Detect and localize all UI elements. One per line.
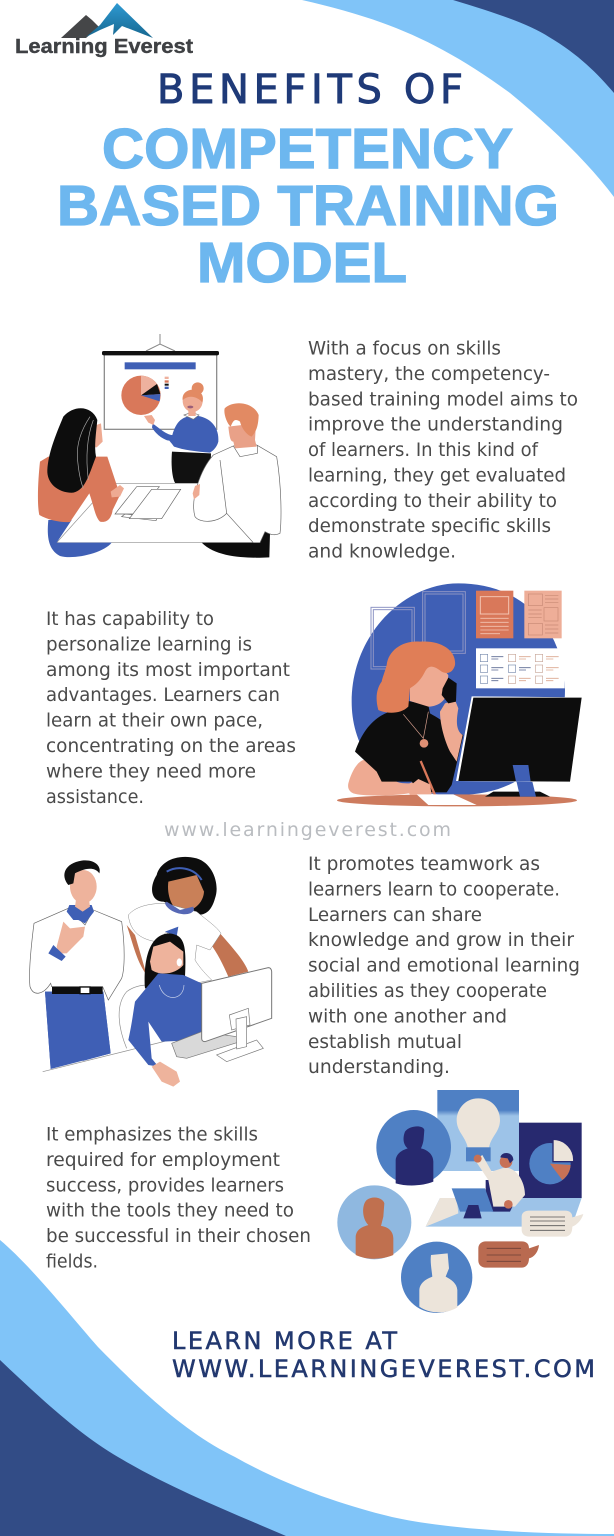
text block 3: establish mutual — [308, 1032, 462, 1053]
bottom left swoosh — [0, 1240, 614, 1536]
text block 4: success, provides learners — [46, 1175, 284, 1196]
text block 3: abilities as they cooperate — [308, 981, 547, 1002]
woman — [348, 641, 463, 795]
avatar circle: terracotta silhouette — [337, 1185, 411, 1259]
speech bubble: cream — [522, 1211, 583, 1237]
papers — [115, 487, 181, 521]
man with orange hair — [193, 403, 281, 558]
projection screen — [102, 334, 219, 429]
text block 1 — [308, 338, 578, 563]
light poster — [524, 591, 562, 638]
standing man — [30, 860, 124, 1069]
heading: competency based training model: MODEL — [197, 231, 407, 295]
desk line — [43, 985, 177, 1072]
top right swoosh — [302, 0, 614, 197]
wall frames — [371, 592, 465, 669]
icon: mountains — [61, 3, 153, 38]
heading: competency based training model: COMPETENCY — [102, 117, 513, 181]
blue backdrop circle — [352, 583, 565, 795]
text block 4: It emphasizes the skills — [46, 1124, 258, 1146]
seated woman — [128, 933, 202, 1087]
text block 2 — [46, 609, 296, 808]
text block 1: based training model aims to — [308, 389, 578, 410]
navy chart panel — [519, 1123, 582, 1198]
text block 1: and knowledge. — [308, 542, 456, 563]
light blue panel with gradient band — [437, 1090, 519, 1171]
text block 4 — [46, 1124, 311, 1272]
avatar circle: dark silhouette — [376, 1110, 451, 1185]
heading: benefits of: BENEFITS OF — [157, 67, 463, 113]
text block 3: with one another and — [308, 1006, 507, 1027]
text block 3: It promotes teamwork as — [308, 854, 540, 875]
desk — [337, 794, 577, 806]
logo: Learning Everest — [15, 3, 193, 58]
illustration: classroom presentation — [38, 334, 281, 558]
woman with dark hair — [38, 408, 124, 557]
text block 4: be successful in their chosen — [46, 1226, 311, 1247]
text block 1: of learners. In this kind of — [308, 440, 538, 461]
text block 1: according to their ability to — [308, 491, 557, 512]
text block 2: among its most important — [46, 660, 290, 681]
text block 1: improve the understanding — [308, 415, 563, 436]
text block 2: assistance. — [46, 787, 144, 808]
text block 1: learning, they get evaluated — [308, 465, 566, 486]
text block 4: with the tools they need to — [46, 1201, 294, 1222]
computer — [202, 968, 272, 1062]
text block 4: required for employment — [46, 1150, 280, 1171]
text block 4: fields. — [46, 1252, 98, 1272]
text block 2: advantages. Learners can — [46, 685, 280, 706]
text block 3 — [308, 854, 580, 1078]
text block 3: knowledge and grow in their — [308, 930, 574, 951]
text block 2: personalize learning is — [46, 634, 252, 655]
paper on desk — [417, 794, 477, 805]
presenter — [144, 382, 218, 483]
text block 3: learners learn to cooperate. — [308, 879, 560, 900]
text block 2: learn at their own pace, — [46, 711, 263, 732]
text block 1: With a focus on skills — [308, 338, 501, 360]
keyboard — [172, 1032, 240, 1058]
logo wordmark: Learning Everest — [15, 35, 193, 58]
speech bubble: terracotta — [478, 1241, 539, 1268]
pie chart — [121, 376, 169, 415]
call to action: WWW.LEARNINGEVEREST.COM — [172, 1355, 595, 1383]
text block 1: mastery, the competency- — [308, 364, 550, 385]
text block 2: It has capability to — [46, 609, 214, 630]
text block 3: Learners can share — [308, 905, 482, 926]
heading: competency based training model — [57, 117, 559, 295]
person at computer — [452, 1153, 525, 1218]
text block 2: concentrating on the areas — [46, 736, 296, 757]
avatar circle: cream silhouette — [401, 1242, 472, 1313]
website watermark: www.learningeverest.com — [164, 819, 451, 841]
text block 3: understanding. — [308, 1057, 450, 1078]
text block 3: social and emotional learning — [308, 956, 580, 977]
orange poster — [476, 591, 513, 638]
table — [57, 483, 262, 543]
floor — [426, 1198, 582, 1227]
floor highlight — [426, 1198, 458, 1227]
heading: competency based training model: BASED TRAINING — [57, 174, 559, 238]
illustration: woman on phone at computer — [337, 583, 582, 806]
call to action: LEARN MORE AT — [172, 1327, 397, 1355]
woman with curly hair — [127, 857, 248, 985]
title — [57, 67, 559, 295]
computer monitor — [456, 696, 582, 797]
call to action — [172, 1327, 595, 1383]
checklist — [476, 648, 565, 688]
light bulb — [457, 1098, 500, 1161]
illustration: three colleagues at computer — [30, 857, 272, 1087]
text block 2: where they need more — [46, 761, 256, 782]
text block 1: demonstrate specific skills — [308, 516, 551, 537]
illustration: online collaboration — [337, 1090, 583, 1313]
